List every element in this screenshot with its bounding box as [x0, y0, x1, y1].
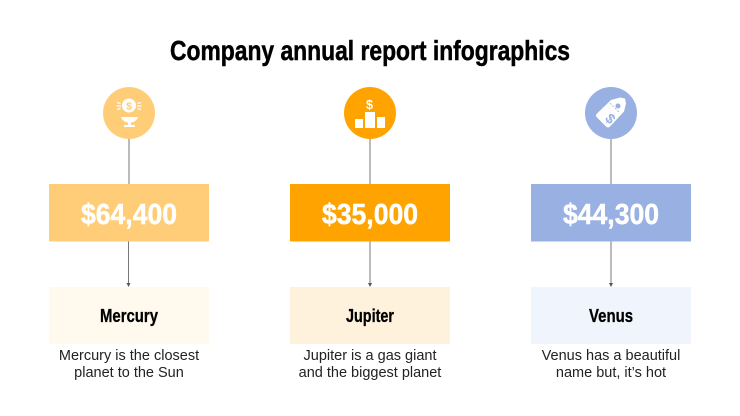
icon: podium with dollar: $	[366, 97, 374, 112]
panel: Jupiter	[290, 87, 450, 381]
label box: Jupiter	[346, 306, 394, 326]
value box	[290, 184, 450, 242]
icon: podium with dollar	[344, 87, 396, 139]
arrow: value to label	[609, 241, 613, 287]
arrow: value to label	[368, 241, 372, 287]
value box: $64,400	[81, 199, 177, 231]
icon: price tag: $	[602, 110, 619, 127]
description: name but, it’s hot	[556, 365, 666, 381]
icon: price tag	[585, 87, 637, 139]
label box: Mercury	[100, 306, 158, 326]
icon: money plant	[103, 87, 155, 139]
value box: $44,300	[563, 199, 659, 231]
connector: icon to value	[369, 139, 371, 184]
label box	[531, 287, 691, 344]
label box	[49, 287, 209, 344]
label box	[290, 287, 450, 344]
value box	[531, 184, 691, 242]
description: Venus has a beautiful	[542, 348, 680, 364]
connector: icon to value	[128, 139, 130, 184]
connector: icon to value	[610, 139, 612, 184]
description: Mercury is the closest	[59, 348, 199, 364]
description: Jupiter is a gas giant	[304, 348, 436, 364]
arrow: value to label	[126, 241, 130, 287]
label box: Venus	[589, 306, 633, 326]
description: planet to the Sun	[74, 365, 184, 381]
value box: $35,000	[322, 199, 418, 231]
panel: Venus	[531, 87, 691, 381]
icon: money plant: $	[126, 100, 132, 112]
title: Company annual report infographics	[170, 35, 570, 66]
value box	[49, 184, 209, 242]
description: and the biggest planet	[299, 365, 441, 381]
panel: Mercury	[49, 87, 209, 381]
